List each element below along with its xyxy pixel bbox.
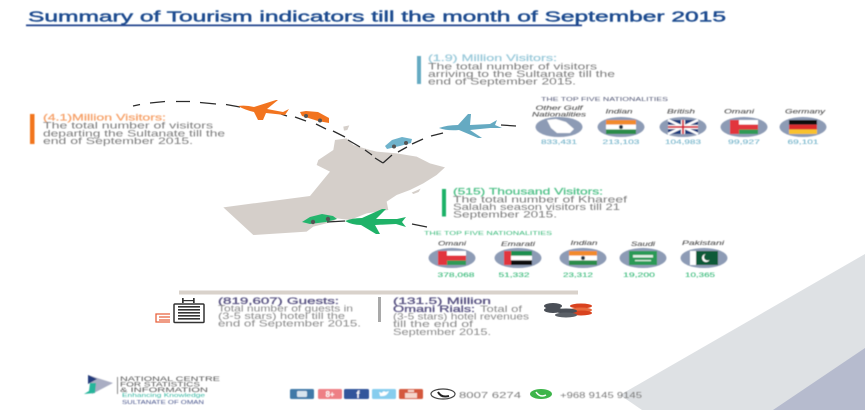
badge: Other Gulf	[536, 117, 582, 137]
divider bar	[179, 290, 578, 294]
logo: NCSI: FOR STATISTICS	[120, 382, 200, 388]
flight path: arrivals	[383, 125, 516, 163]
WhatsApp number: +968 9145 9145	[560, 391, 643, 400]
panel: guests	[218, 296, 361, 328]
heading: THE TOP FIVE NATIONALITIES	[541, 97, 669, 103]
panel: departing visitors: (4.1)Million Visitors:	[43, 112, 166, 124]
labels: Indian	[570, 240, 598, 247]
background shape: grey band	[620, 254, 865, 410]
heading: THE TOP FIVE NATIONALITIES	[424, 231, 553, 237]
badge: India	[560, 248, 606, 268]
panel: arriving visitors: end of September 2015.	[428, 76, 576, 88]
flight path: departures	[133, 102, 383, 163]
labels: British	[667, 108, 696, 116]
labels: Omani	[724, 108, 755, 116]
numbers: 378,068	[438, 272, 475, 279]
numbers: 10,365	[685, 272, 716, 279]
panel: departing visitors	[30, 112, 225, 147]
badge: Germany	[780, 117, 826, 137]
labels	[438, 240, 725, 248]
social media icons: 8+	[325, 390, 335, 399]
labels: Saudi	[631, 241, 656, 248]
panel: guests: (819,607) Guests:	[218, 296, 339, 307]
icon: coin stacks	[544, 303, 592, 318]
panel: hotel revenues: (3-5 stars) hotel revenues	[393, 312, 530, 322]
icon: green car	[302, 214, 337, 224]
labels: Pakistani	[682, 240, 725, 247]
numbers: 19,200	[623, 272, 656, 279]
vertical separator	[378, 297, 381, 322]
logo: NCSI: Enhancing Knowledge	[122, 393, 205, 399]
badge: UAE	[494, 248, 542, 268]
logo: NCSI	[84, 375, 220, 406]
title: Summary of Tourism indicators till the month of September 2015	[28, 8, 726, 26]
panel: Khareef visitors: Salalah season visitors till 21	[453, 202, 620, 213]
panel: arriving visitors: (1.9) Million Visitors:	[428, 53, 557, 64]
icon: WhatsApp	[530, 389, 552, 399]
panel: Khareef visitors: The total number of Khareef	[453, 194, 628, 206]
badge: Oman	[720, 117, 768, 137]
panel: hotel revenues: Total of	[480, 304, 523, 314]
numbers: 51,332	[498, 272, 530, 279]
icon: green plane	[345, 209, 406, 234]
background shape: blue-grey corner	[773, 348, 865, 410]
icon: blue plane	[439, 114, 502, 138]
phone number: 8007 6274	[459, 391, 522, 400]
numbers: 833,431	[541, 139, 578, 146]
panel: arrivals top five nationalities	[532, 97, 826, 146]
panel: hotel revenues: (131.5) Million	[393, 296, 491, 307]
map of Oman	[223, 125, 445, 235]
panel: departing visitors: The total number of visitors	[43, 120, 213, 132]
logo: NCSI: SULTANATE OF OMAN	[122, 400, 204, 406]
panel: guests: (3-5 stars) hotel till the	[218, 311, 345, 321]
labels: Emarati	[501, 241, 536, 248]
labels: Indian	[606, 108, 633, 116]
numbers: 213,103	[602, 139, 640, 146]
labels	[532, 105, 826, 118]
panel: Khareef visitors	[442, 186, 628, 220]
numbers: 23,312	[563, 272, 594, 279]
labels: Omani	[438, 240, 467, 248]
numbers	[438, 272, 716, 279]
labels: Nationalities	[532, 112, 587, 118]
social media icons: f	[356, 390, 360, 401]
badge: Oman	[428, 248, 476, 268]
icon: orange plane	[238, 100, 289, 120]
panel: departing visitors: departing the Sultanate till the	[43, 128, 225, 140]
numbers: 69,101	[788, 139, 819, 146]
logo: NCSI: & INFORMATION	[120, 388, 208, 394]
icon: phone	[431, 389, 455, 399]
labels: Other Gulf	[536, 105, 584, 112]
numbers	[541, 139, 819, 146]
panel: Khareef visitors: September 2015.	[453, 210, 557, 220]
badge: Saudi	[620, 248, 666, 268]
badge: Pakistan	[680, 248, 728, 268]
panel: guests: Total number of guests in	[218, 304, 353, 314]
icon: hotel building	[156, 298, 204, 322]
numbers: 99,927	[728, 139, 761, 146]
badge: UK	[660, 117, 706, 137]
panel: arriving visitors	[417, 53, 615, 88]
panel: guests: end of September 2015.	[218, 318, 361, 328]
flight path: Khareef	[327, 221, 427, 227]
panel: Khareef top five nationalities	[424, 231, 728, 279]
panel: arriving visitors: arriving to the Sultanate till the	[428, 69, 615, 80]
numbers: 104,983	[665, 139, 702, 146]
badge: India	[598, 117, 644, 137]
panel: hotel revenues: Omani Rials:	[393, 304, 475, 315]
icon: orange car	[300, 111, 329, 123]
panel: arriving visitors: The total number of visitors	[428, 62, 597, 72]
panel: hotel revenues: September 2015.	[393, 327, 491, 337]
panel: Khareef visitors: (515) Thousand Visitors:	[453, 186, 603, 198]
social media icons	[290, 389, 423, 401]
icon: blue car	[385, 137, 412, 149]
panel: departing visitors: end of September 2015.	[43, 136, 193, 147]
panel: hotel revenues: till the end of	[393, 319, 474, 329]
logo: NCSI: NATIONAL CENTRE	[120, 377, 220, 383]
labels: Germany	[785, 108, 826, 116]
panel: hotel revenues	[393, 296, 530, 337]
